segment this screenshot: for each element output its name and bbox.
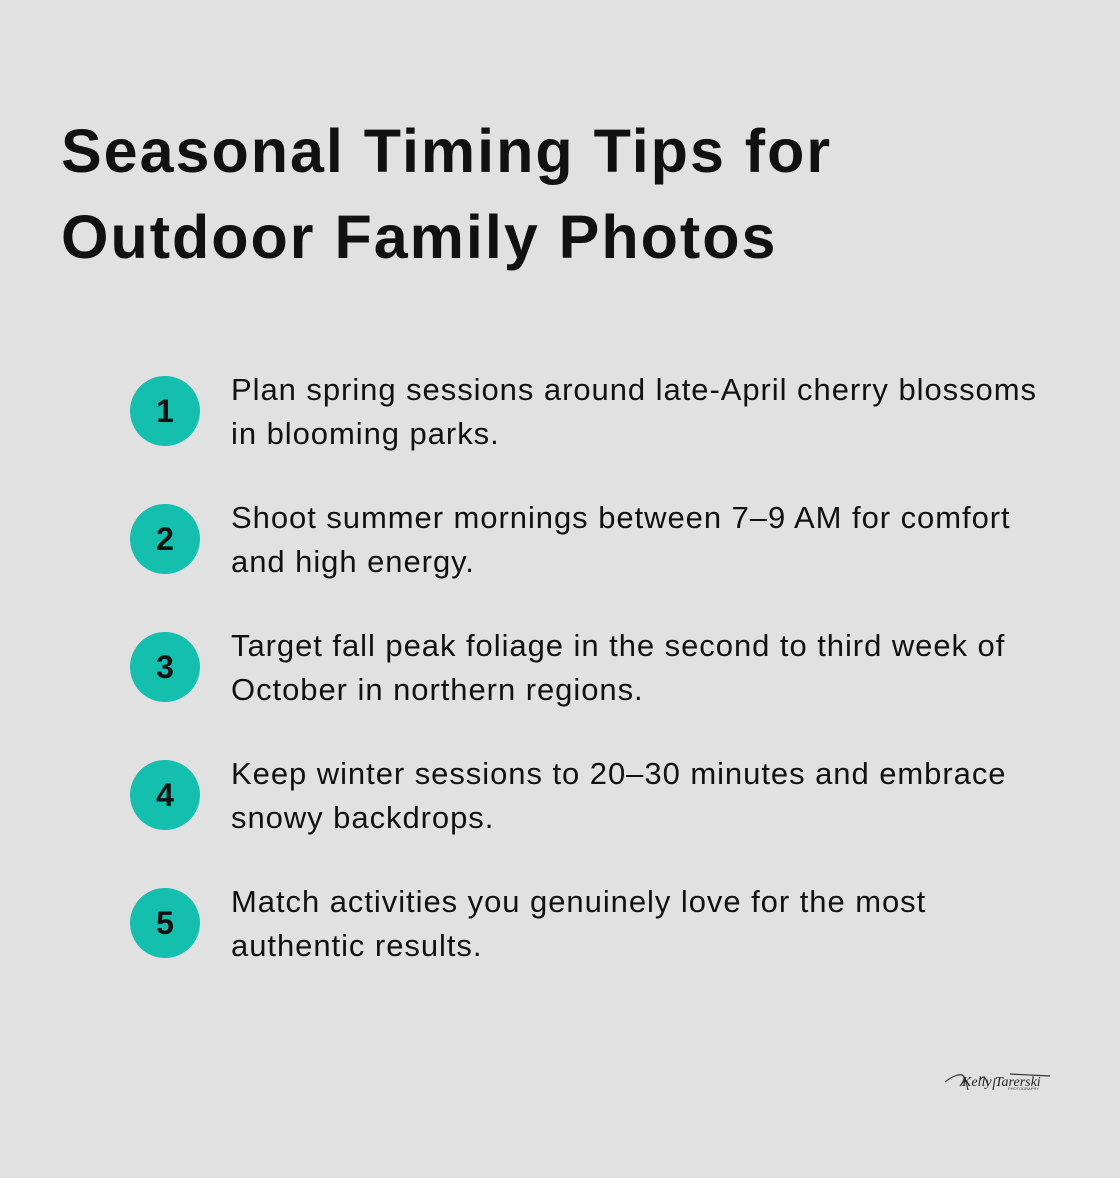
title: Seasonal Timing Tips for bbox=[61, 117, 832, 185]
item 5: Match activities you genuinely love for the most bbox=[231, 884, 926, 919]
item 2: and high energy. bbox=[231, 544, 475, 579]
item 2 bbox=[130, 500, 1011, 579]
item 5 bbox=[130, 884, 926, 963]
item 3: October in northern regions. bbox=[231, 672, 644, 707]
item 4: Keep winter sessions to 20–30 minutes and embrace bbox=[231, 756, 1006, 791]
item 5: authentic results. bbox=[231, 928, 482, 963]
title bbox=[61, 117, 832, 271]
item 3: Target fall peak foliage in the second to third week of bbox=[231, 628, 1005, 663]
item 1: in blooming parks. bbox=[231, 416, 500, 451]
item 5: 5 bbox=[156, 905, 174, 941]
item 4 bbox=[130, 756, 1006, 835]
item 2: Shoot summer mornings between 7–9 AM for comfort bbox=[231, 500, 1011, 535]
item 1: 1 bbox=[156, 393, 174, 429]
item 4: 4 bbox=[156, 777, 174, 813]
item 4: snowy backdrops. bbox=[231, 800, 494, 835]
logo bbox=[944, 1073, 1050, 1091]
item 3: 3 bbox=[156, 649, 174, 685]
item 3 bbox=[130, 628, 1005, 707]
item 2: 2 bbox=[156, 521, 174, 557]
item 1 bbox=[130, 372, 1037, 451]
title: Outdoor Family Photos bbox=[61, 203, 777, 271]
logo: PHOTOGRAPHY bbox=[1008, 1086, 1039, 1091]
item 1: Plan spring sessions around late-April cherry blossoms bbox=[231, 372, 1037, 407]
logo: Kelly Tarerski bbox=[961, 1075, 1041, 1090]
